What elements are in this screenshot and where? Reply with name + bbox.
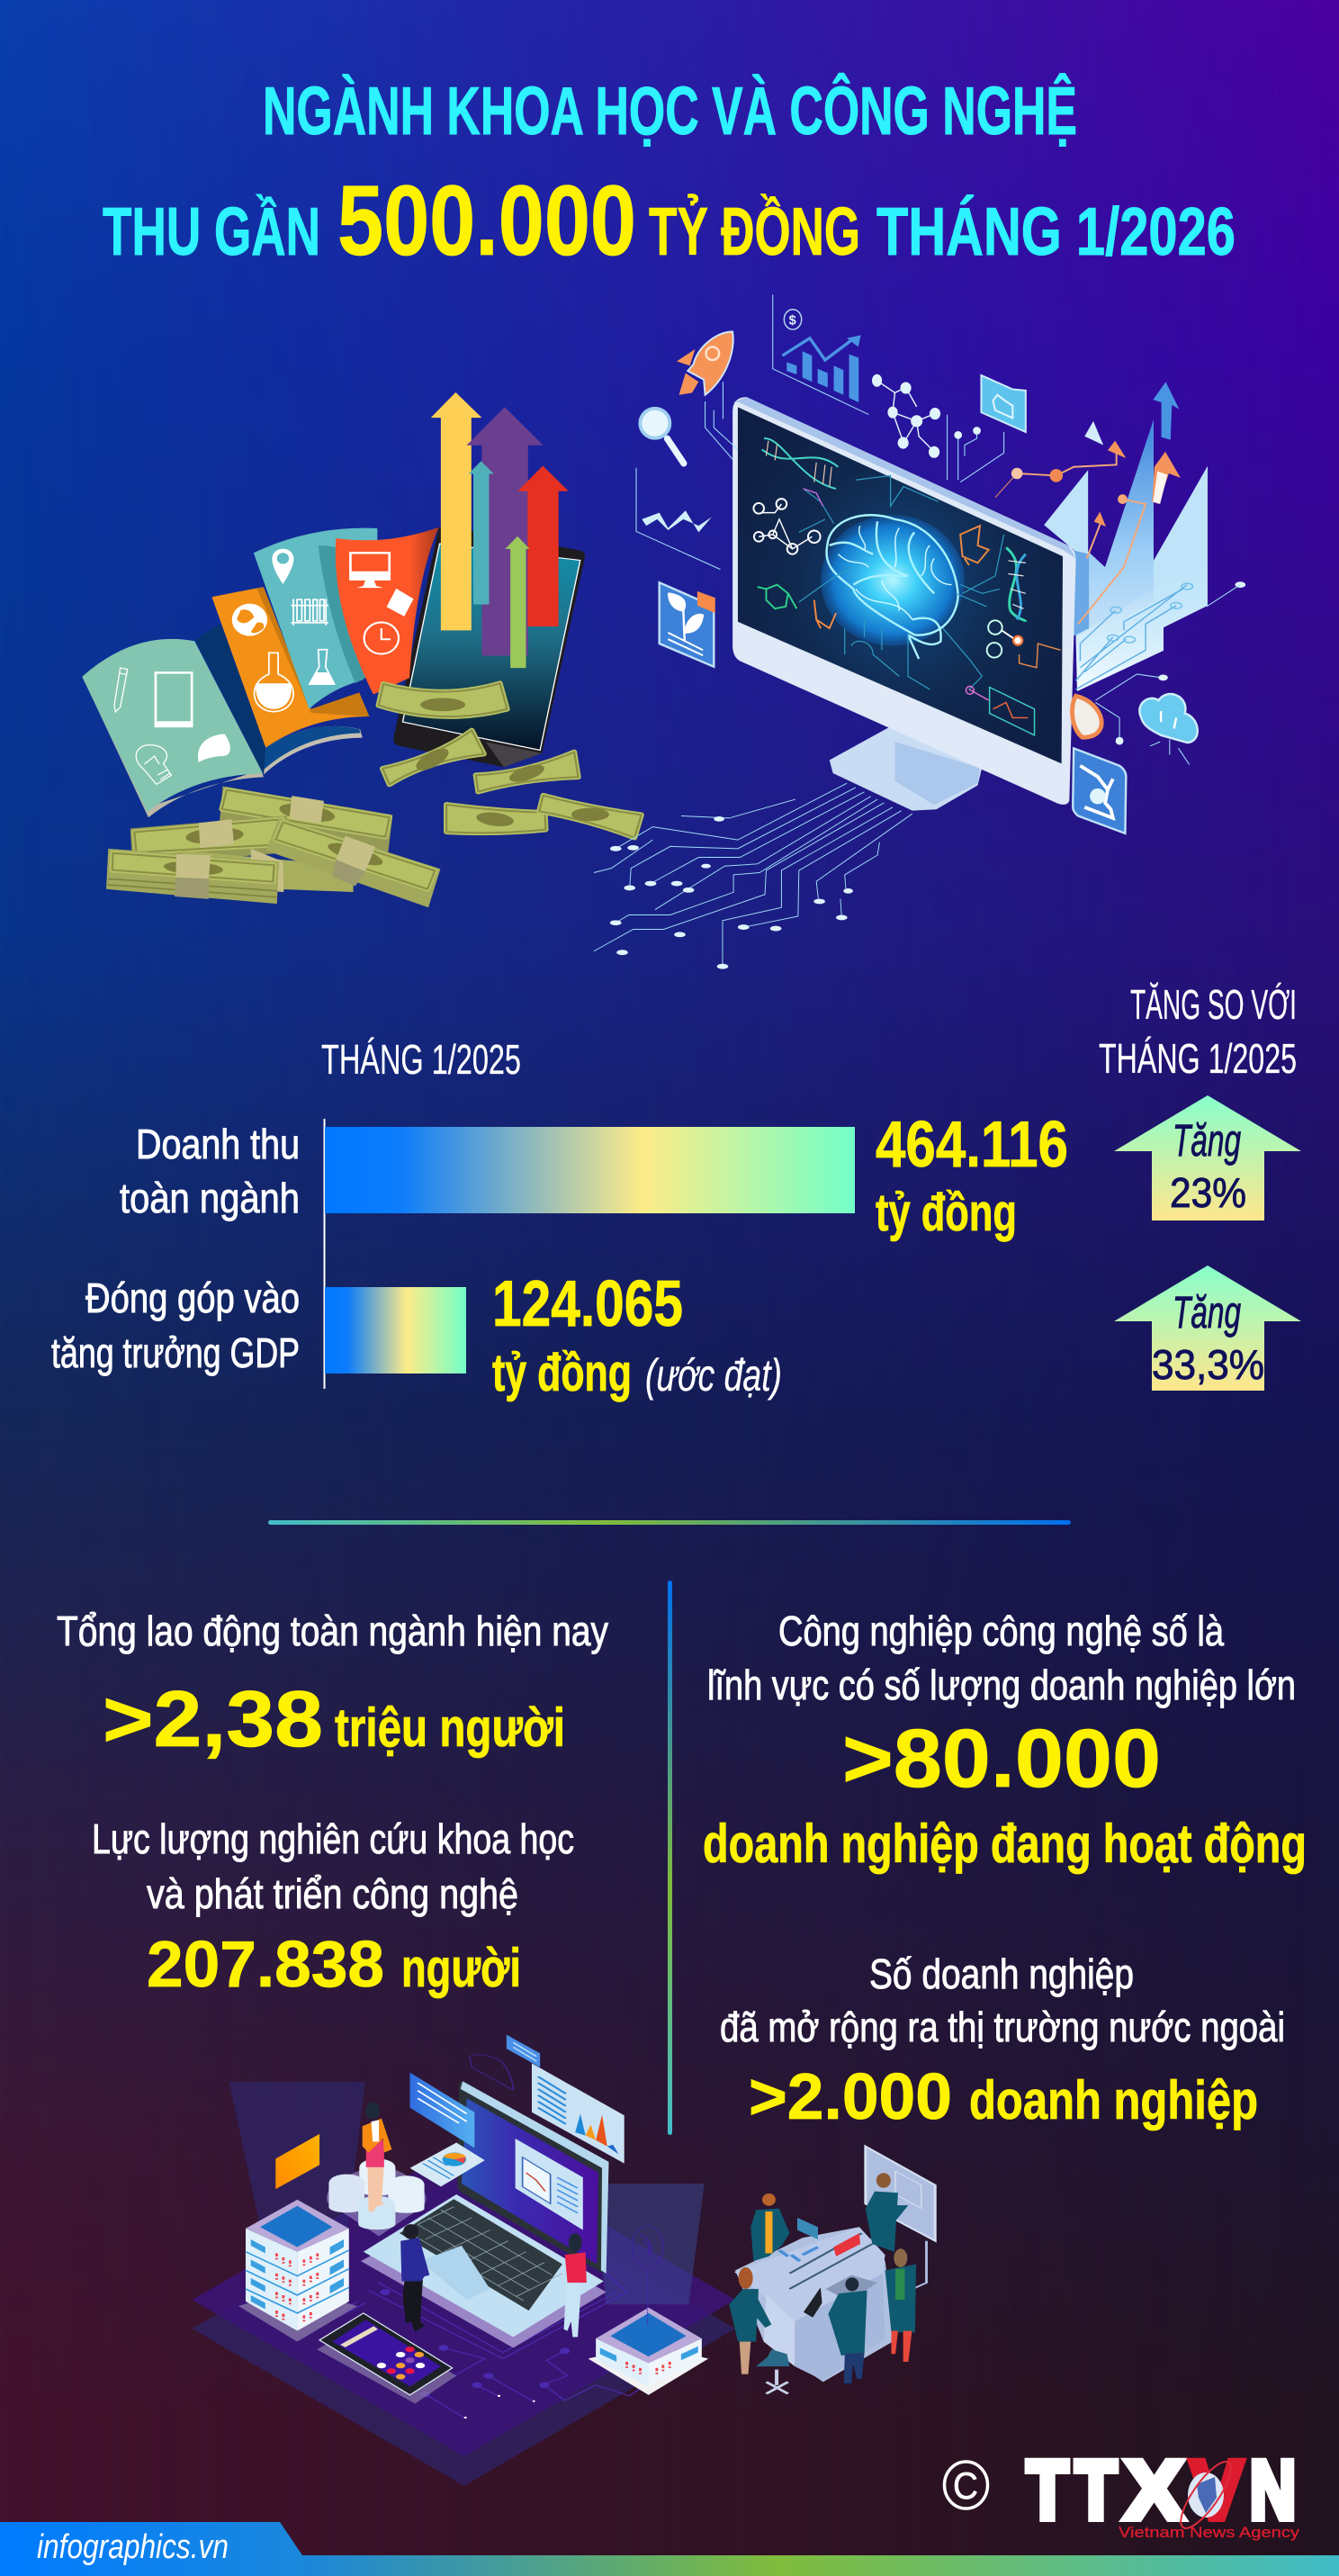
icon: round flask xyxy=(255,653,293,712)
arrow: GDP contribution up 33.3%: 33,3% xyxy=(1152,1341,1264,1388)
agency letters: N xyxy=(1250,2445,1296,2536)
circuit traces under monitor xyxy=(594,783,912,967)
brain hologram xyxy=(821,515,965,659)
platform circuit lines xyxy=(317,2265,650,2418)
stat: overseas enterprises: >2.000 xyxy=(749,2061,952,2133)
open book xyxy=(82,527,439,817)
arrow: revenue up 23% xyxy=(1114,1095,1301,1220)
copyright symbol: C xyxy=(953,2464,978,2507)
icon: rocket xyxy=(677,331,738,460)
circuit nodes xyxy=(610,816,853,969)
footer tab xyxy=(0,2522,302,2576)
icon: test tubes xyxy=(291,599,328,626)
agency letters: T xyxy=(1027,2445,1068,2536)
value: GDP contribution: (ước đạt) xyxy=(645,1350,782,1401)
value: revenue: tỷ đồng xyxy=(876,1184,1017,1242)
label: GDP contribution: Đóng góp vào xyxy=(85,1274,300,1321)
whiteboard xyxy=(866,2147,935,2292)
stat: research workforce: Lực lượng nghiên cứu khoa học xyxy=(92,1815,574,1862)
website: infographics.vn xyxy=(37,2528,229,2566)
label: revenue: toàn ngành xyxy=(120,1175,300,1221)
icon: leaf xyxy=(198,734,230,762)
copyright symbol xyxy=(945,2462,988,2508)
bar: GDP contribution xyxy=(325,1287,466,1374)
mini line chart xyxy=(636,468,721,570)
tablet xyxy=(393,527,585,767)
illustration: computer monitor with glowing brain xyxy=(594,294,1245,969)
server tower xyxy=(238,2200,357,2342)
arrow: GDP contribution up 33.3%: Tăng xyxy=(1173,1287,1241,1338)
person: woman in pink xyxy=(564,2233,587,2337)
laptop xyxy=(361,2081,609,2348)
science lab scene xyxy=(729,2147,935,2393)
stat: research workforce: người xyxy=(401,1938,521,1998)
stat: overseas enterprises: Số doanh nghiệp xyxy=(869,1950,1134,1997)
stat: overseas enterprises: doanh nghiệp xyxy=(969,2070,1258,2130)
stat: overseas enterprises xyxy=(720,1950,1285,2133)
lab staff xyxy=(729,2173,916,2383)
logo: TTXVN copyright xyxy=(945,2445,1300,2541)
icon: globe xyxy=(232,604,267,636)
person: man in navy xyxy=(400,2224,429,2332)
stat: research workforce xyxy=(92,1815,574,2001)
bar chart xyxy=(773,294,868,415)
footer bar xyxy=(0,2522,1339,2576)
agency letters: X xyxy=(1125,2445,1183,2536)
chart headers xyxy=(321,981,1297,1083)
label: GDP contribution: tăng trưởng GDP xyxy=(51,1329,300,1376)
title line 2 xyxy=(103,166,1236,276)
agency letters: V xyxy=(1191,2445,1243,2536)
value: GDP contribution: tỷ đồng xyxy=(492,1344,632,1402)
horizontal divider xyxy=(268,1520,1071,1525)
icon: robot arm card xyxy=(1073,748,1126,833)
vertical divider xyxy=(668,1581,672,2135)
arrow: revenue up 23%: Tăng xyxy=(1173,1115,1241,1166)
icon: notepad xyxy=(387,589,414,617)
icon: cloud xyxy=(1139,694,1198,764)
title line 2: THU GẦN xyxy=(103,194,320,269)
lab bench xyxy=(734,2218,895,2393)
rising arrows xyxy=(431,392,569,668)
molecule network xyxy=(873,374,939,457)
illustration: books, money and rising arrows xyxy=(82,392,642,907)
orange sphere xyxy=(1073,696,1101,737)
title line 2: 500.000 xyxy=(337,166,636,276)
icon: conical flask xyxy=(310,650,335,685)
stat: digital enterprises: >80.000 xyxy=(842,1713,1161,1805)
book page icons xyxy=(114,549,414,784)
icon: pencil xyxy=(114,668,128,712)
value: GDP contribution: 124.065 xyxy=(492,1268,683,1340)
icon: clock xyxy=(364,622,399,654)
arrow: revenue up 23%: 23% xyxy=(1170,1169,1246,1216)
label: revenue: Doanh thu xyxy=(136,1121,300,1167)
label: revenue xyxy=(120,1121,300,1221)
header: compared with january 2025 xyxy=(1099,981,1297,1082)
icon: magnifier xyxy=(640,409,684,464)
stat: research workforce: và phát triển công nghệ xyxy=(147,1870,518,1917)
stat: total workforce: >2,38 xyxy=(103,1674,323,1763)
bar chart: revenue and GDP contribution xyxy=(51,1109,1068,1402)
icon: folder xyxy=(948,375,1026,482)
header: january 2025: THÁNG 1/2025 xyxy=(321,1036,521,1083)
title xyxy=(103,73,1236,276)
illustration: isometric laptop, servers and lab xyxy=(192,2035,935,2486)
screen molecules and DNA xyxy=(753,438,1061,735)
icon: plant card xyxy=(660,582,715,667)
icon: light bulb xyxy=(136,745,171,784)
agency letters xyxy=(1027,2445,1296,2536)
smartphone xyxy=(317,2313,456,2403)
icon: envelope xyxy=(275,2134,319,2189)
icon: monitor xyxy=(350,553,391,588)
stat: total workforce: triệu người xyxy=(335,1698,565,1758)
arrow: GDP contribution up 33.3% xyxy=(1114,1265,1301,1391)
floating panels xyxy=(410,2035,625,2186)
globe emblem xyxy=(1173,2455,1239,2535)
icon: tablet device xyxy=(155,672,193,727)
title line 2: THÁNG 1/2026 xyxy=(876,194,1236,269)
person: woman in orange xyxy=(363,2102,391,2211)
agency name: Vietnam News Agency xyxy=(1119,2524,1300,2541)
value: revenue: 464.116 xyxy=(876,1109,1068,1181)
monitor body xyxy=(732,397,1076,811)
value: revenue xyxy=(876,1109,1068,1242)
stat: total workforce: Tổng lao động toàn ngành hiện nay xyxy=(57,1608,608,1654)
stat: digital enterprises xyxy=(703,1608,1307,1874)
stat: digital enterprises: Công nghiệp công nghệ số là xyxy=(778,1608,1224,1654)
axis xyxy=(324,1119,326,1389)
isometric platform xyxy=(192,2082,735,2486)
money stacks xyxy=(106,787,440,907)
bar chart: $ xyxy=(789,314,796,329)
value: GDP contribution xyxy=(492,1268,782,1402)
title line 2: TỶ ĐỒNG xyxy=(649,194,860,269)
flying banknotes xyxy=(379,683,642,838)
monitor screen xyxy=(738,407,1063,763)
stat: research workforce: 207.838 xyxy=(147,1929,384,2001)
bar: revenue xyxy=(325,1127,855,1213)
icon: location pin xyxy=(272,549,294,584)
agency letters: T xyxy=(1075,2445,1117,2536)
small server xyxy=(589,2226,708,2395)
rising spikes chart xyxy=(995,382,1245,691)
label: GDP contribution xyxy=(51,1274,300,1376)
cylinders with standing woman xyxy=(327,2102,427,2237)
stat: total workforce xyxy=(57,1608,608,1763)
